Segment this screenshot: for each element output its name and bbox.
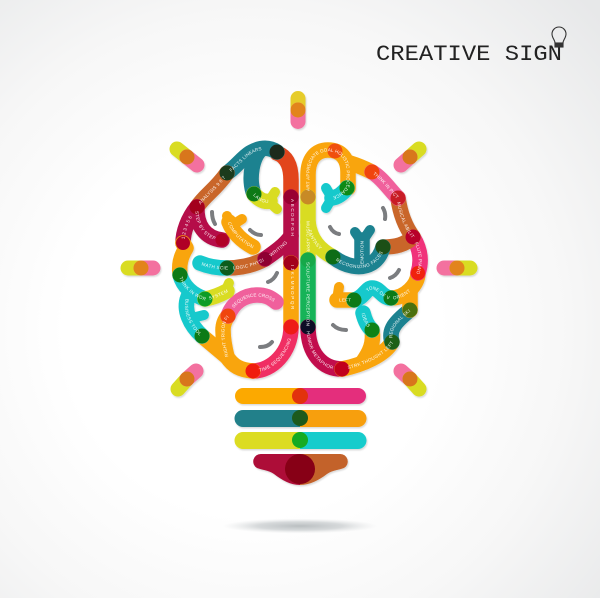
brain text labels: ART APPRECIATE GOAL HOLISTIC PROCESSING (306, 148, 350, 191)
ray pills around the bulb (128, 98, 470, 389)
ground shadow (222, 518, 378, 534)
brain text labels: TIME SEQUENCING (258, 338, 291, 372)
brain text labels: 1 2 3 4 5 6 (182, 216, 192, 239)
brain text labels: LOGIC PHYSICS (233, 258, 264, 270)
brain text labels: RIGHT TRIGON FIELD (221, 316, 229, 357)
ray: right (444, 260, 470, 276)
brain text labels: STEP BY STEP (195, 211, 216, 239)
brain: left hemisphere (172, 144, 298, 378)
brain text labels: ANALYSIS 9 8 7 (198, 176, 225, 205)
brain text labels: SEQUENCE CROSS DATUM (232, 293, 275, 308)
grey brain fold dashes (212, 208, 399, 347)
brain text labels: MATH SCIENCE (202, 262, 228, 270)
ray: lower right (401, 371, 419, 389)
brain text labels: COMPUTATION (228, 222, 254, 248)
ray: top (290, 98, 306, 122)
brain text labels: SCULPTURE PERCEPTION (306, 262, 310, 326)
ray: upper right (401, 149, 419, 165)
left brain junction dots (172, 144, 298, 378)
brain text labels: EMOTIONS (360, 241, 364, 264)
bulb tip (253, 454, 348, 485)
brain text labels (180, 147, 422, 372)
brain text labels: THINK IN WORDS (180, 276, 206, 301)
brain text labels: SYSTEM (208, 289, 228, 300)
base stripe 1 (235, 388, 366, 404)
brain text labels: STRK THOUGHT LEFT (348, 340, 393, 369)
brain text labels: ABCDEFGH (291, 199, 294, 236)
brain text labels: DANCE (333, 188, 348, 200)
ray: left (128, 260, 153, 276)
base stripe 2 (234, 410, 367, 427)
brain text labels: LANGUAGE (253, 193, 268, 203)
brain text labels: RECOGNIZING FACES (336, 251, 382, 268)
brain: right hemisphere (300, 144, 425, 376)
base stripe 3 (234, 432, 367, 449)
ray: lower left (178, 371, 196, 389)
title: creative sign (376, 27, 566, 67)
brain text labels: WRITING (269, 241, 287, 256)
brain text labels: FLUTE PIANO (414, 242, 422, 274)
brain text labels: MUSICAL ABILITY (397, 202, 414, 238)
bulb base stripes (234, 388, 367, 485)
icon: small light bulb (552, 27, 566, 47)
brain text labels: ORIENT (393, 289, 410, 300)
brain text labels: LEFT HAND (339, 298, 351, 302)
right brain junction dots (300, 144, 425, 376)
brain text labels: IDEAS (362, 313, 370, 327)
brain text labels: IJKLMNOPQR (290, 265, 294, 310)
brain text labels: MUSIC APPR (306, 221, 310, 252)
brain text labels: FANTASY (308, 230, 322, 249)
title: creative sign: CREATIVE SIGN (376, 42, 562, 67)
brain text labels: HUMOR METAPHOR (306, 331, 334, 370)
brain text labels: REGIONAL SKILLS (389, 309, 410, 338)
brain text labels: TONE OF VOICE (366, 286, 390, 300)
brain text labels: THINK IN PICTURE TOOL OF (374, 172, 399, 198)
ray: upper left (177, 149, 197, 165)
brain text labels: FACTS LINEARS (229, 147, 262, 172)
brain text labels: BUSINESS TOOLS (184, 299, 200, 336)
